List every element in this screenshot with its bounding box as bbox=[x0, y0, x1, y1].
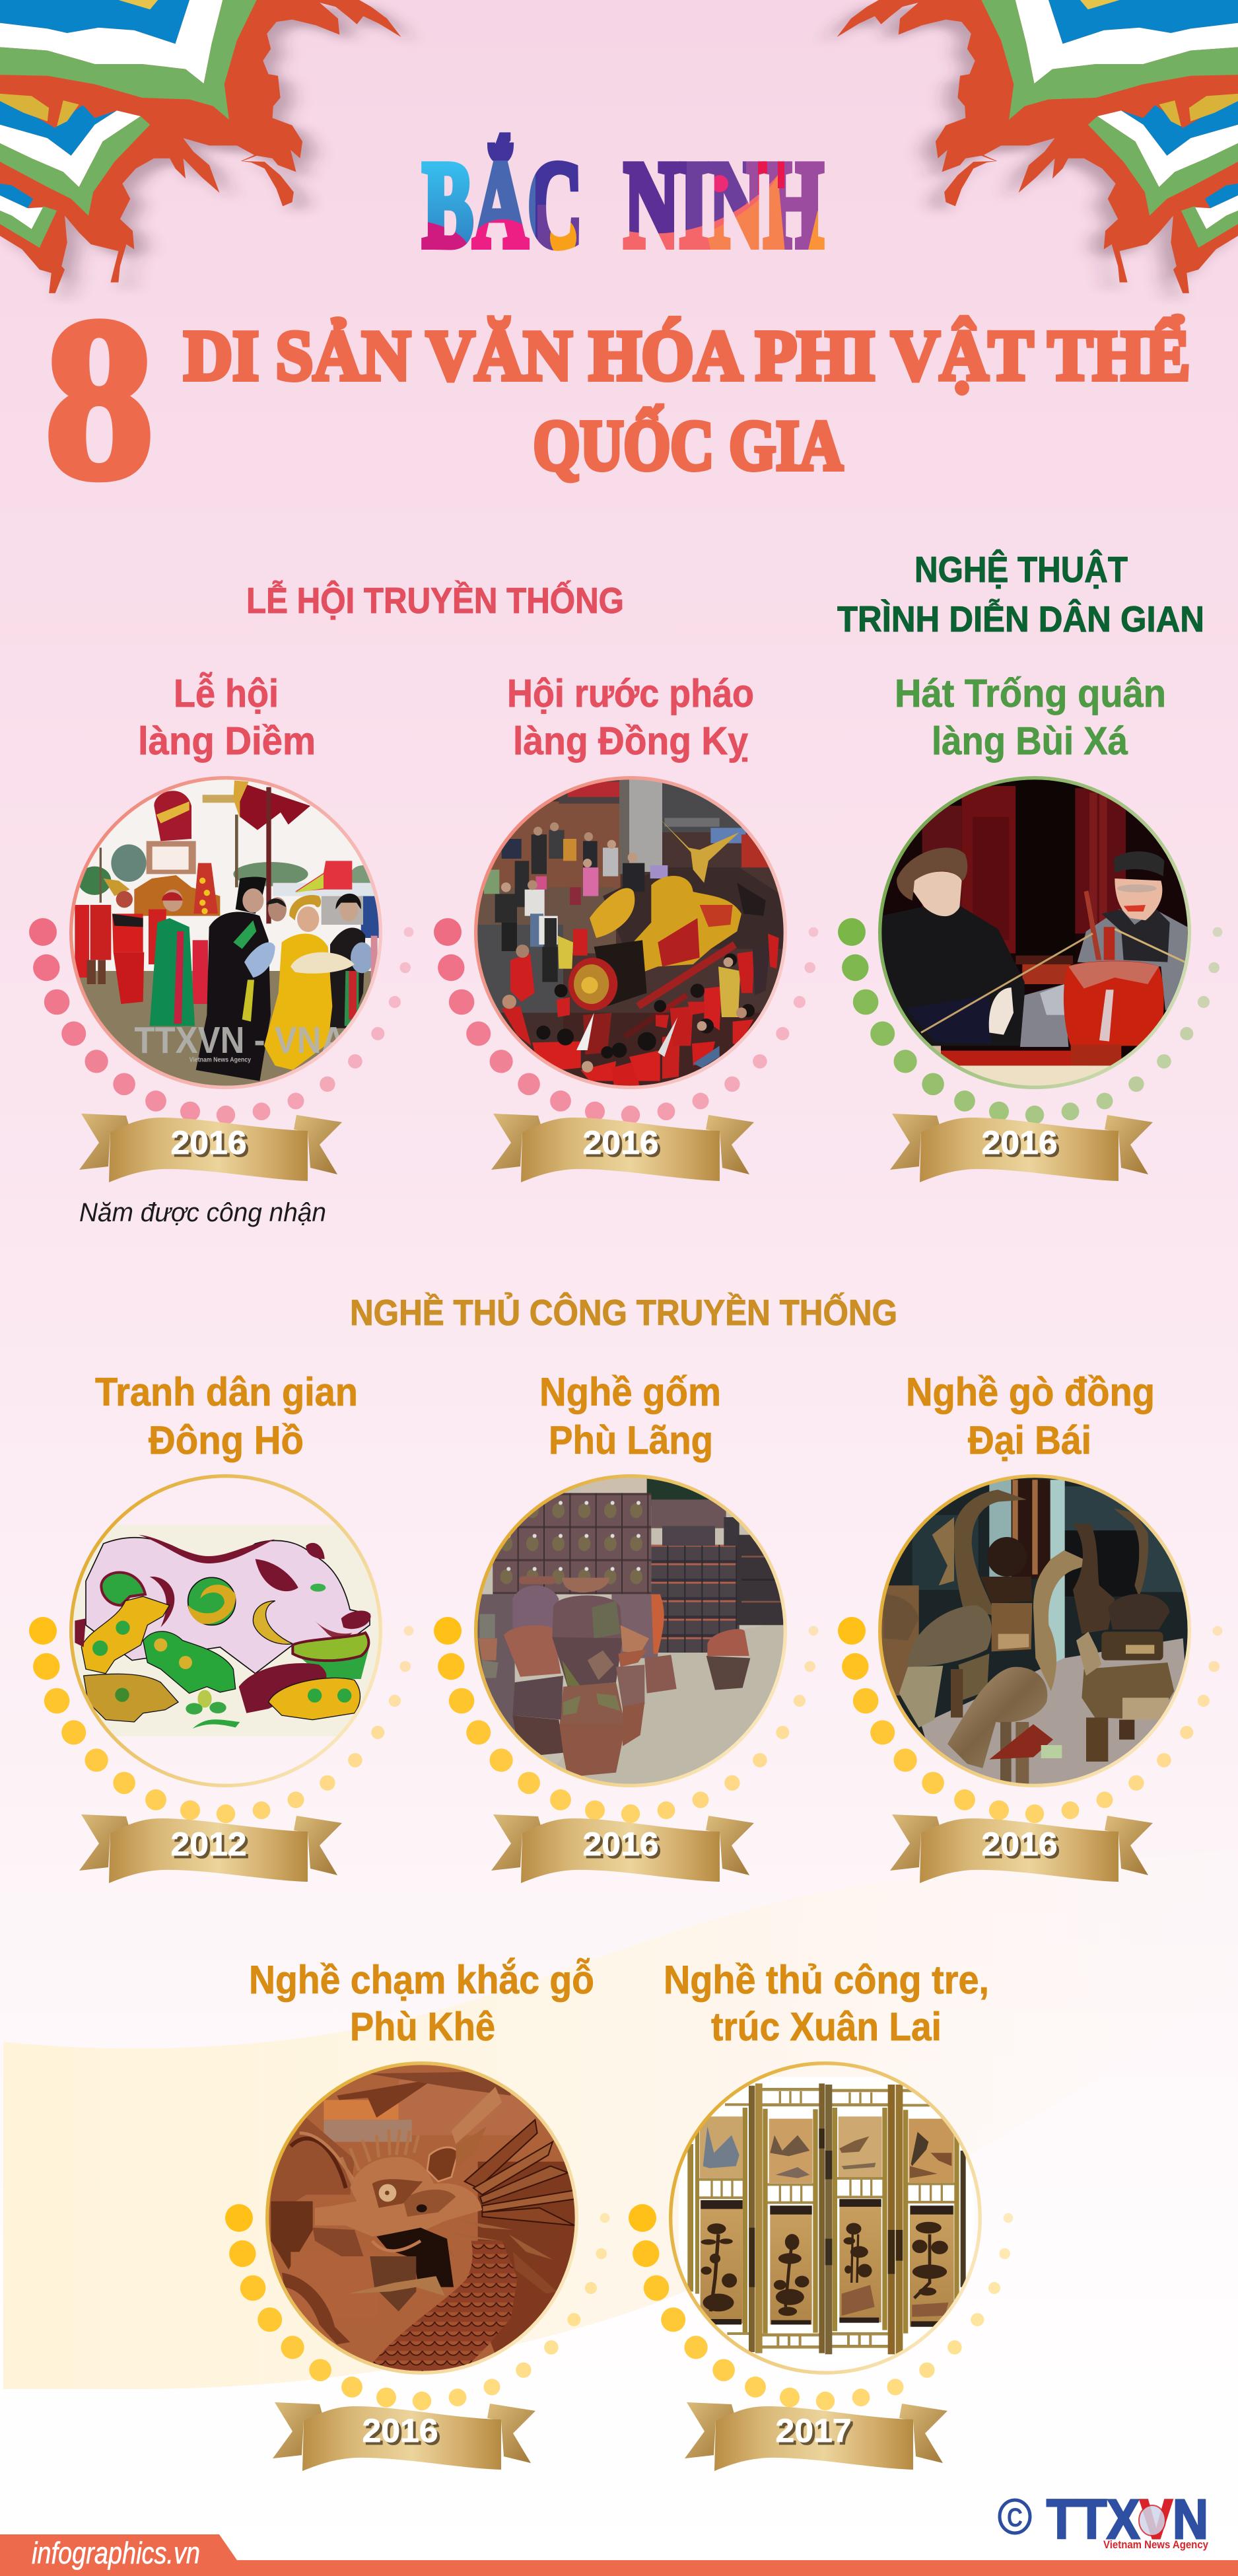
item title: nghe gom phu lang bbox=[539, 1370, 721, 1462]
category heading: nghe thuat trinh dien dan gian: TRÌNH DIỄN DÂN GIAN bbox=[837, 598, 1204, 639]
ribbon: year 2016 bbox=[890, 1814, 1153, 1883]
title: Bac Ninh: NINH bbox=[624, 137, 823, 273]
item title: le hoi lang diem: Lễ hội bbox=[174, 672, 279, 715]
heading: di san van hoa phi vat the: DI SẢN VĂN HÓA PHI VẬT THỂ bbox=[184, 316, 1190, 395]
dots: craft 4 bbox=[225, 2204, 609, 2410]
ribbon: year 2016 bbox=[273, 2402, 535, 2471]
item title: nghe thu cong tre truc xuan lai bbox=[664, 1958, 989, 2049]
number 8: 8 bbox=[45, 270, 154, 526]
item title: nghe thu cong tre truc xuan lai: Nghề thủ công tre, bbox=[664, 1958, 989, 2002]
item title: hat trong quan lang bui xa: làng Bùi Xá bbox=[932, 719, 1128, 763]
photo: le hoi lang diem: Vietnam News Agency bbox=[189, 1056, 251, 1063]
ornament: top left roof corner bbox=[0, 0, 401, 293]
dots: festival 1 bbox=[29, 918, 413, 1124]
ribbon: year 2016: 2016 bbox=[362, 2412, 438, 2449]
item title: nghe cham khac go phu khe bbox=[249, 1958, 594, 2049]
ribbon: year 2017 bbox=[685, 2402, 947, 2471]
item title: nghe cham khac go phu khe: Phù Khê bbox=[350, 2005, 495, 2049]
item title: hat trong quan lang bui xa bbox=[895, 672, 1166, 763]
item title: tranh dan gian dong ho: Đông Hồ bbox=[149, 1418, 304, 1462]
photo: phu lang pottery bbox=[471, 1471, 790, 1791]
ribbon: year 2016: 2016 bbox=[981, 1826, 1058, 1863]
item title: hat trong quan lang bui xa: Hát Trống quân bbox=[895, 672, 1166, 715]
category heading: nghe thuat trinh dien dan gian bbox=[837, 549, 1204, 639]
background swoosh bbox=[3, 1849, 1238, 2389]
ornament: top right roof corner bbox=[837, 0, 1238, 293]
category heading: le hoi truyen thong: LỄ HỘI TRUYỀN THỐNG bbox=[246, 580, 624, 621]
item title: hoi ruoc phao lang dong ky: Hội rước pháo bbox=[507, 672, 754, 715]
logo: TTXVN news agency: Vietnam News Agency bbox=[1103, 2538, 1208, 2551]
photo: hat trong quan bbox=[875, 773, 1194, 1092]
item title: le hoi lang diem bbox=[138, 672, 316, 763]
item title: nghe gom phu lang: Nghề gốm bbox=[539, 1370, 721, 1414]
ribbon: year 2016 bbox=[79, 1114, 342, 1182]
ribbon: year 2016 bbox=[491, 1114, 754, 1182]
photo: le hoi lang diem bbox=[66, 773, 386, 1092]
title: Bac Ninh bbox=[423, 135, 823, 273]
item title: tranh dan gian dong ho bbox=[95, 1370, 358, 1462]
photo: dong ho painting bbox=[66, 1476, 380, 1785]
ribbon: year 2016: 2016 bbox=[170, 1124, 247, 1161]
photo: xuan lai bamboo screen bbox=[671, 2063, 980, 2373]
dots: craft 5 bbox=[629, 2204, 1013, 2410]
ribbon: year 2012 bbox=[79, 1814, 342, 1883]
category heading: nghe thuat trinh dien dan gian: NGHỆ THUẬT bbox=[914, 549, 1128, 590]
footer bar bbox=[0, 2534, 1238, 2576]
item title: nghe go dong dai bai: Đại Bái bbox=[968, 1418, 1091, 1462]
dots: performance bbox=[838, 918, 1222, 1124]
note: nam duoc cong nhan: Năm được công nhận bbox=[79, 1198, 326, 1227]
ribbon: year 2016: 2016 bbox=[582, 1826, 659, 1863]
ribbon: year 2016: 2016 bbox=[582, 1124, 659, 1161]
heading: quoc gia: QUỐC GIA bbox=[533, 406, 843, 485]
photo: dai bai bronze bbox=[875, 1471, 1194, 1791]
ribbon: year 2016 bbox=[890, 1114, 1153, 1182]
ribbon: year 2017: 2017 bbox=[775, 2412, 852, 2449]
logo: TTXVN news agency: C bbox=[1007, 2503, 1023, 2532]
item title: nghe cham khac go phu khe: Nghề chạm khắc gỗ bbox=[249, 1958, 594, 2002]
dots: craft 2 bbox=[434, 1617, 818, 1823]
dots: craft 1 bbox=[29, 1617, 413, 1823]
title: Bac Ninh: BẮC bbox=[423, 135, 582, 273]
category heading: nghe thu cong truyen thong: NGHỀ THỦ CÔNG TRUYỀN THỐNG bbox=[350, 1292, 897, 1333]
item title: hoi ruoc phao lang dong ky bbox=[507, 672, 754, 763]
photo: le hoi lang diem: TTXVN - VNA bbox=[134, 1020, 345, 1061]
item title: hoi ruoc phao lang dong ky: làng Đồng Kỵ bbox=[513, 719, 748, 763]
footer text: infographics.vn: infographics.vn bbox=[32, 2536, 200, 2570]
item title: nghe thu cong tre truc xuan lai: trúc Xuân Lai bbox=[711, 2005, 942, 2049]
ribbon: year 2016: 2016 bbox=[981, 1124, 1058, 1161]
item title: nghe gom phu lang: Phù Lãng bbox=[549, 1418, 713, 1462]
item title: nghe go dong dai bai: Nghề gò đồng bbox=[906, 1370, 1155, 1414]
dots: craft 3 bbox=[838, 1617, 1222, 1823]
item title: le hoi lang diem: làng Diềm bbox=[138, 719, 316, 763]
ribbon: year 2016 bbox=[491, 1814, 754, 1883]
item title: nghe go dong dai bai bbox=[906, 1370, 1155, 1462]
photo: phu khe wood carving bbox=[262, 2058, 582, 2378]
logo: TTXVN news agency: TTXVN bbox=[1047, 2488, 1208, 2550]
photo: hoi ruoc phao lang dong ky bbox=[471, 773, 790, 1092]
item title: tranh dan gian dong ho: Tranh dân gian bbox=[95, 1370, 358, 1414]
dots: festival 2 bbox=[434, 918, 818, 1124]
ribbon: year 2012: 2012 bbox=[170, 1826, 247, 1863]
